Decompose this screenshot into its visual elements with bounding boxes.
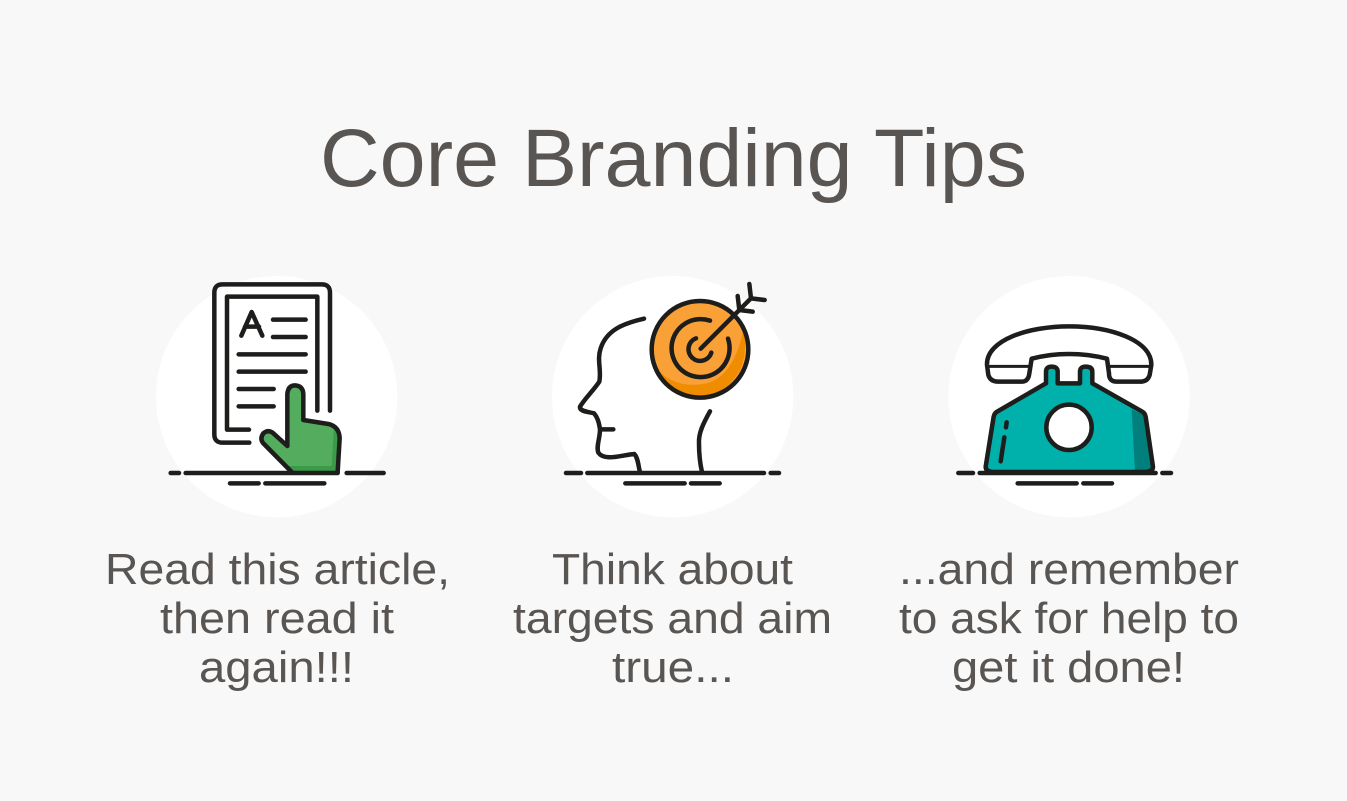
icon: head with target and arrow [552, 276, 793, 517]
caption: ask for help [899, 545, 1239, 692]
caption: read the article: Read this article, [105, 545, 450, 594]
caption: think about targets [513, 545, 832, 692]
icon: telephone [948, 276, 1190, 517]
caption: ask for help: ...and remember [899, 545, 1239, 594]
caption: read the article [105, 545, 450, 692]
panel: ask for help [899, 276, 1239, 692]
icon: document with pointing hand [156, 276, 397, 517]
caption: think about targets: targets and aim [513, 594, 832, 643]
panel: read the article [105, 276, 450, 692]
caption: think about targets: Think about [552, 545, 793, 594]
caption: read the article: then read it [160, 594, 394, 643]
title: Core Branding Tips [320, 113, 1027, 204]
caption: ask for help: to ask for help to [899, 594, 1239, 643]
caption: think about targets: true... [612, 643, 734, 692]
caption: read the article: again!!! [199, 643, 354, 692]
panel: think about targets [513, 276, 832, 692]
caption: ask for help: get it done! [952, 643, 1185, 692]
